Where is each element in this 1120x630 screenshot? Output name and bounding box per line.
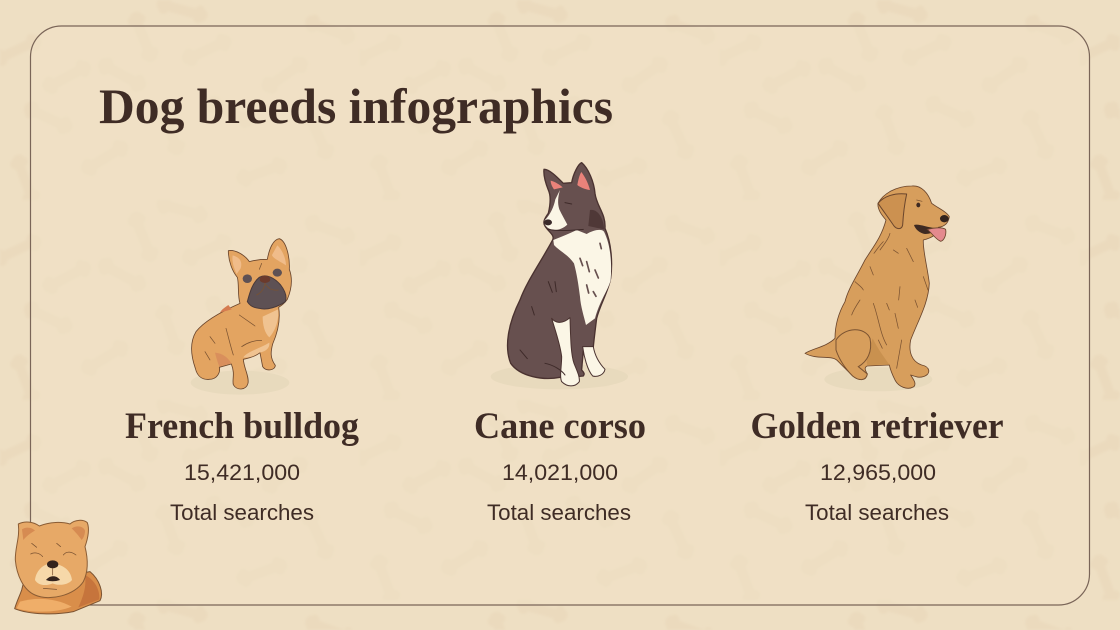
search count: 12,965,000 bbox=[820, 460, 936, 485]
breed name: French bulldog bbox=[125, 406, 359, 447]
title: Dog breeds infographics bbox=[99, 78, 613, 134]
illustration: Cane corso bbox=[491, 163, 628, 389]
caption: Total searches bbox=[170, 500, 314, 525]
caption: Total searches bbox=[487, 500, 631, 525]
column: French bulldog bbox=[125, 239, 359, 525]
search count: 14,021,000 bbox=[502, 460, 618, 485]
search count: 15,421,000 bbox=[184, 460, 300, 485]
column: Golden retriever bbox=[750, 186, 1004, 525]
icon: chow chow corner mascot bbox=[15, 520, 102, 614]
illustration: French bulldog bbox=[191, 239, 291, 395]
column: Cane corso bbox=[474, 163, 646, 525]
breed name: Golden retriever bbox=[750, 406, 1004, 447]
caption: Total searches bbox=[805, 500, 949, 525]
illustration: Golden retriever bbox=[805, 186, 949, 391]
breed name: Cane corso bbox=[474, 406, 646, 447]
